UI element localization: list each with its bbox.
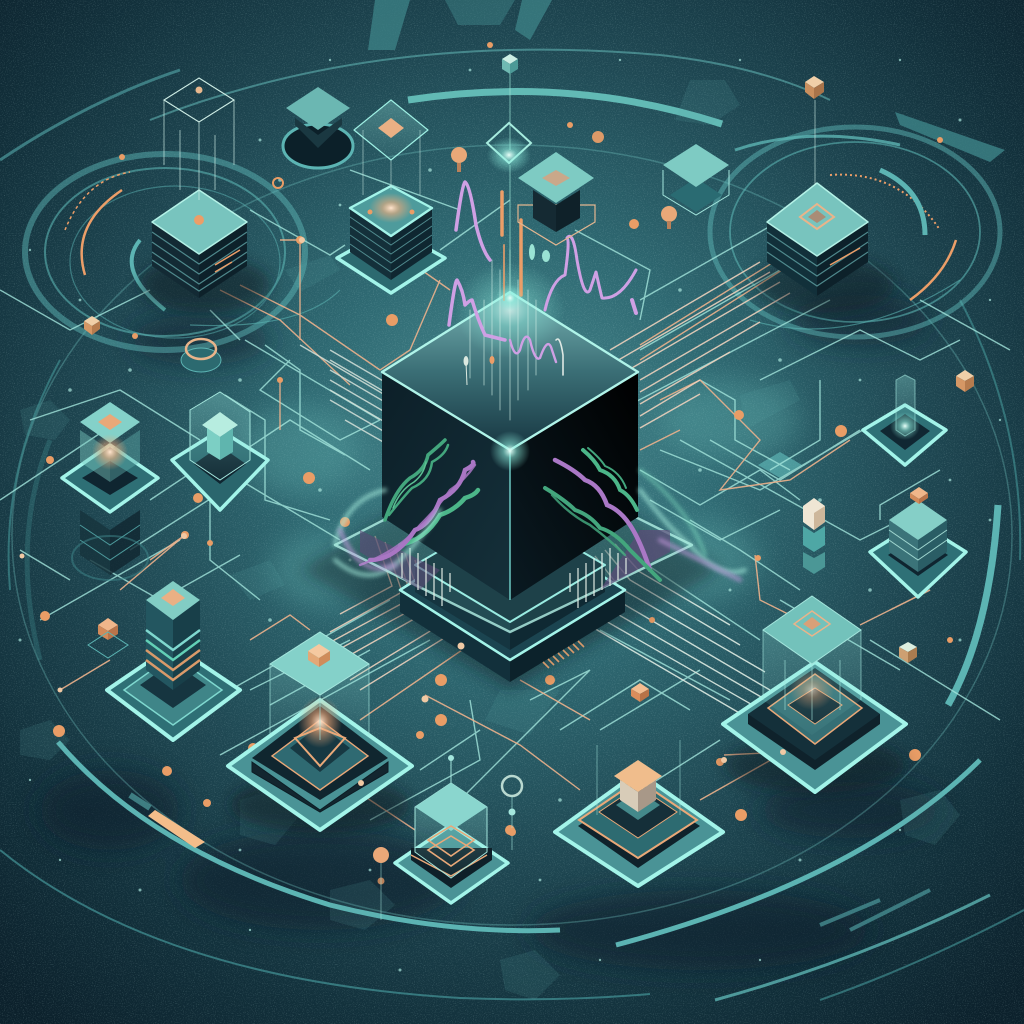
- chip bus traces: upper-left: [300, 345, 385, 443]
- cube: right edge: [956, 370, 974, 392]
- pink and purple signal waves above cube: [449, 182, 636, 375]
- cube top face: [382, 292, 638, 450]
- chip bus traces: lower-right: [555, 544, 775, 725]
- node: vertical block column: [803, 498, 825, 574]
- corner glow: [490, 431, 530, 471]
- chip bus traces: upper-right: [610, 262, 790, 428]
- chip bus traces: lower-left: [305, 536, 454, 690]
- trace endpoints: [20, 237, 786, 786]
- node: top-left server: [140, 78, 270, 313]
- floating orange cubes: [84, 131, 974, 920]
- dark vignette blotches: [40, 295, 940, 970]
- chip teeth: [543, 641, 584, 668]
- top beacon cube: [502, 54, 518, 74]
- glass platform plate: [335, 455, 692, 632]
- orange ring: signal marker: [502, 776, 522, 796]
- cube: left lower: [88, 618, 128, 658]
- sphere: small top node: [592, 131, 604, 143]
- cube: centre lower: [631, 683, 649, 702]
- light mist patches beside the chip: [240, 380, 800, 605]
- glass top orange cube: [308, 644, 330, 667]
- node: glowing stack: [337, 100, 445, 293]
- node: bottom stepped pyramid: [555, 740, 723, 886]
- node: bottom glass box: [395, 755, 508, 903]
- top orange cube: [805, 76, 824, 99]
- circuit traces: teal: [0, 170, 1010, 820]
- orange cap: [910, 487, 928, 504]
- central processor base: [300, 440, 720, 690]
- node: large glass platform left: [228, 632, 412, 833]
- lower base layer: [400, 520, 625, 682]
- node: ring beacon left: [181, 339, 221, 372]
- beacon above cube: [487, 54, 531, 290]
- small sprouts on cube top: [464, 244, 550, 385]
- central cube: [382, 292, 638, 600]
- base shadow: [300, 440, 720, 690]
- orange dots: [40, 42, 953, 835]
- sphere: bottom orange node: [373, 847, 389, 920]
- bottom signal stem: [508, 796, 516, 850]
- orbital ring cluster: right: [710, 127, 1000, 337]
- hex glass cap: [354, 100, 428, 160]
- node: top-right glass box: [663, 144, 729, 215]
- cube: right lower: [899, 642, 917, 663]
- green and purple waveforms on cube: [360, 440, 660, 580]
- cube vertical edge: [509, 450, 511, 600]
- cube: left upper: [84, 316, 100, 335]
- energy wisps around base: [335, 470, 745, 580]
- purple plate edges: [360, 530, 440, 590]
- sphere: upper right node: [661, 206, 677, 229]
- teal diamond chip pad: [758, 452, 802, 478]
- wireframe cube with antennae: [164, 78, 234, 200]
- node: right server: [755, 76, 895, 313]
- node: small ring platform: [283, 87, 353, 168]
- node: left glass tower: [62, 402, 158, 580]
- glass box outline: [270, 632, 369, 740]
- node: lower-left tower: [107, 581, 240, 740]
- node: left glass box: [172, 392, 268, 510]
- node: right stack: [870, 487, 966, 597]
- node: top-center box: [518, 152, 595, 245]
- pin rows: [402, 548, 626, 608]
- sphere: top orange node: [451, 147, 467, 172]
- node: right glowing pedestal: [863, 375, 946, 465]
- circuit traces: orange: [60, 240, 930, 830]
- cube left face: [382, 372, 510, 600]
- lower stacked tower: [72, 510, 148, 580]
- node: right large glass platform: [723, 596, 906, 793]
- orbital ring cluster: left: [25, 154, 340, 350]
- middle base layer: [415, 510, 605, 650]
- light beam above cube: [455, 192, 565, 420]
- cube right face: [510, 372, 638, 600]
- glass cube above: [763, 596, 861, 735]
